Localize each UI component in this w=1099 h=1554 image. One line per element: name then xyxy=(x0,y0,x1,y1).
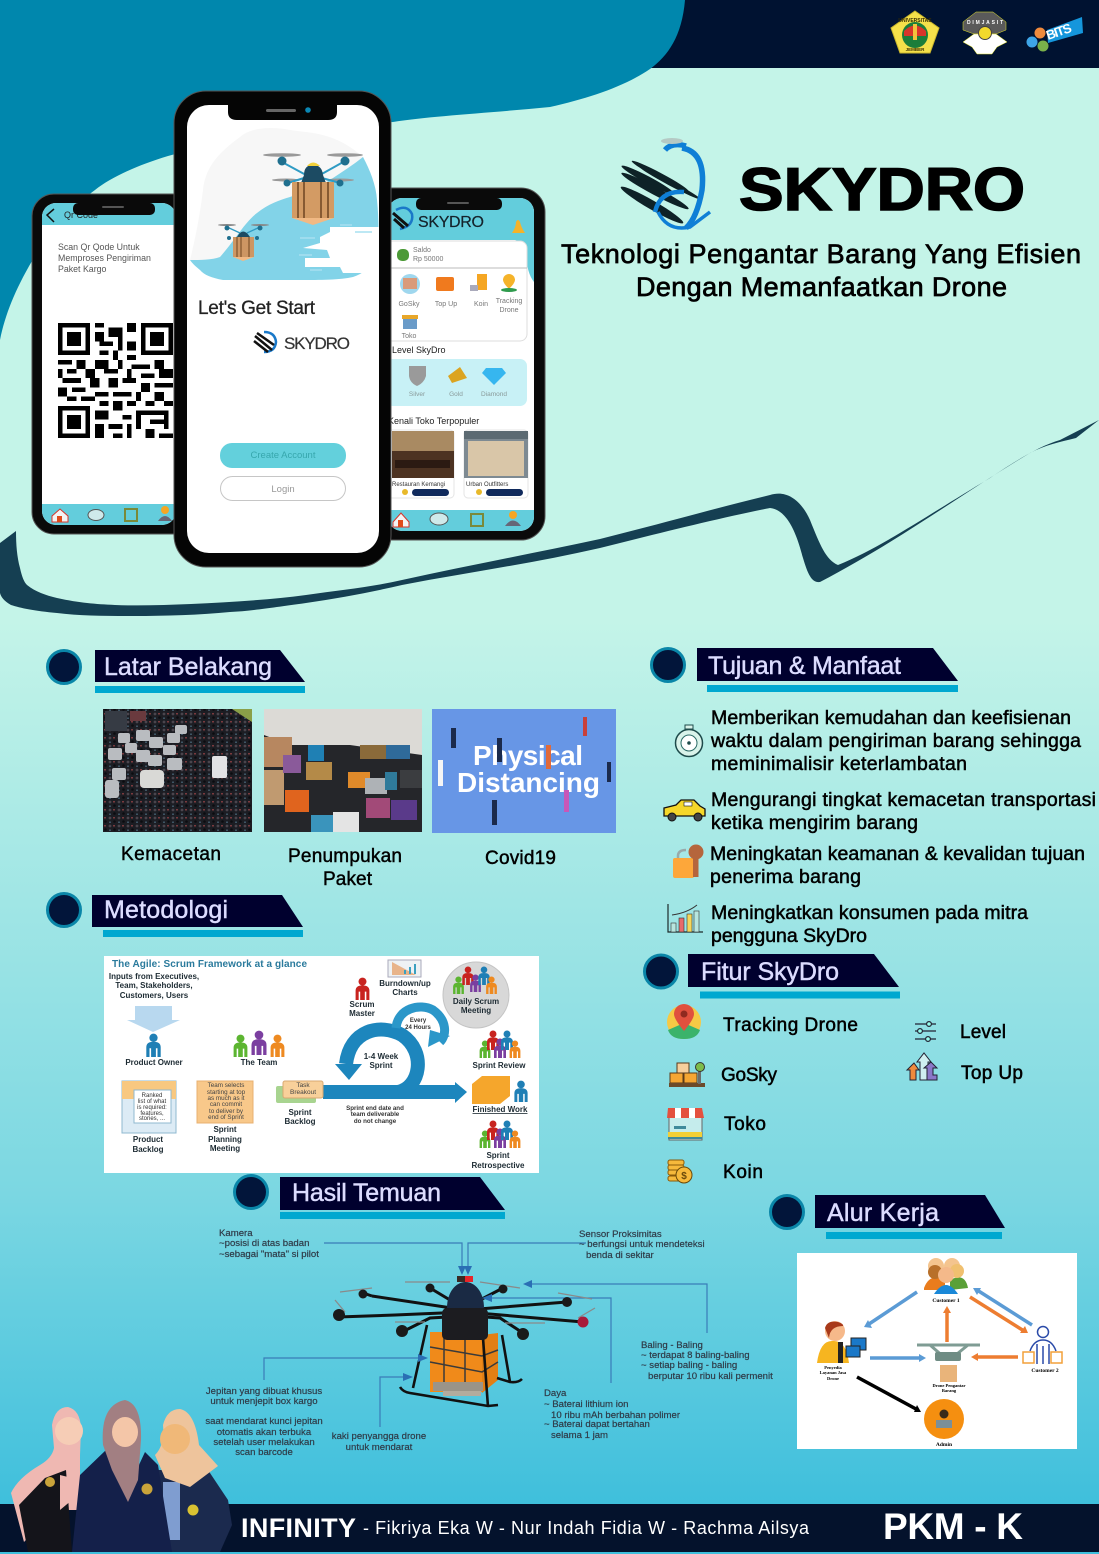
footer team text xyxy=(241,1513,810,1543)
customer 2: Customer 2 xyxy=(1031,1368,1059,1374)
feature: Koin: Koin xyxy=(723,1162,763,1183)
benefit: time: Memberikan kemudahan dan keefisienan xyxy=(711,707,1071,729)
callout: daya: ~ Baterai dapat bertahan xyxy=(544,1419,650,1430)
feature: GoSky: GoSky xyxy=(721,1065,778,1086)
chart: scrum framework diagram: 24 Hours xyxy=(405,1025,431,1031)
phone: home screen: Toko xyxy=(402,333,416,340)
icon: lock and key xyxy=(673,844,704,878)
feature: GoSky xyxy=(669,1062,778,1087)
callout arrows xyxy=(403,1266,532,1381)
photo captions: Penumpukan xyxy=(288,846,402,867)
chart: scrum framework diagram: as much as it xyxy=(207,1095,245,1102)
feature: Top Up xyxy=(907,1053,1023,1084)
callout: jepitan xyxy=(205,1386,323,1458)
icon: coins: $ xyxy=(681,1171,687,1182)
benefit: consumers: Meningkatkan konsumen pada mitra xyxy=(711,902,1028,924)
photo: physical distancing: Distancing xyxy=(457,767,600,798)
inputs: Inputs from Executives, xyxy=(109,972,199,981)
button: create account xyxy=(220,443,346,468)
small drone xyxy=(218,224,269,261)
footer team text: INFINITY xyxy=(241,1513,356,1543)
chart: scrum framework diagram: list of what xyxy=(138,1099,166,1105)
big drone xyxy=(263,153,363,225)
customer 1 xyxy=(924,1258,968,1304)
phone: home screen: Gold xyxy=(449,391,463,398)
footer band xyxy=(0,1504,1099,1552)
callout: daya: ~ Baterai lithium ion xyxy=(544,1399,629,1410)
photo captions: Covid19 xyxy=(485,848,556,869)
heading: Fitur SkyDro: Fitur SkyDro xyxy=(701,958,839,986)
chart: scrum framework diagram: do not change xyxy=(354,1118,397,1125)
inputs xyxy=(109,972,199,1000)
person right xyxy=(155,1409,232,1552)
phone: home screen: Drone xyxy=(499,307,519,314)
chart: scrum framework diagram: Ranked xyxy=(142,1093,162,1099)
logo: Universitas Jember: JEMBER xyxy=(906,47,925,52)
burndown charts xyxy=(388,960,421,977)
benefit: consumers xyxy=(668,902,1028,947)
feature: Level xyxy=(915,1022,1006,1043)
logos xyxy=(891,11,1083,54)
phone body xyxy=(174,91,391,567)
app logo xyxy=(396,208,412,229)
phone: home screen: Urban Outfitters xyxy=(466,482,508,488)
phone body xyxy=(360,188,545,540)
photo: physical distancing: Physical xyxy=(473,740,583,771)
icon: parcels on scale xyxy=(669,1062,705,1087)
finished work xyxy=(472,1076,510,1104)
title: SKYDRO xyxy=(739,156,1025,223)
callout: jepitan: untuk menjepit box kargo xyxy=(210,1396,318,1407)
heading: Hasil Temuan xyxy=(234,1176,505,1219)
balance card xyxy=(385,241,527,341)
workflow diagram xyxy=(797,1253,1077,1449)
admin xyxy=(924,1399,964,1448)
heading: Tujuan & Manfaat: Tujuan & Manfaat xyxy=(708,652,901,680)
heading: Metodologi: Metodologi xyxy=(104,896,228,924)
chart: scrum framework diagram: Breakout xyxy=(290,1089,316,1096)
app logo: SKYDRO xyxy=(284,334,350,353)
phone: home screen: SKYDRO xyxy=(418,214,484,231)
subtitle: Teknologi Pengantar Barang Yang Efisien xyxy=(561,239,1081,269)
button: create account: Create Account xyxy=(251,450,316,461)
phone: home screen: Rp 50000 xyxy=(413,256,443,263)
bottom nav xyxy=(388,510,534,531)
chart: scrum framework diagram: stories, ... xyxy=(139,1116,165,1122)
feature: tracking drone xyxy=(667,1004,858,1039)
feature: tracking drone: Tracking Drone xyxy=(723,1015,858,1036)
benefit: traffic: Mengurangi tingkat kemacetan transportasi xyxy=(711,789,1096,811)
chart: scrum framework diagram: Team selects xyxy=(208,1082,244,1089)
admin: Admin xyxy=(936,1442,952,1448)
chart: scrum framework diagram: Burndown/up xyxy=(379,979,431,988)
callout: kamera: ~sebagai "mata" si pilot xyxy=(219,1249,319,1260)
icon: car xyxy=(664,800,705,821)
icon: map pin xyxy=(667,1004,701,1039)
callout: jepitan: setelah user melakukan xyxy=(213,1437,315,1448)
callout: baling: berputar 10 ribu kali permenit xyxy=(648,1371,773,1382)
notch xyxy=(416,198,502,210)
heading: Fitur SkyDro xyxy=(644,954,900,998)
chart: scrum framework diagram: Scrum xyxy=(350,1000,374,1009)
benefit: traffic xyxy=(664,789,1096,834)
QR code xyxy=(58,323,173,438)
chart: scrum framework diagram: Meeting xyxy=(461,1006,491,1015)
callout: daya xyxy=(544,1388,681,1441)
chart: scrum framework diagram: is required: xyxy=(137,1105,167,1111)
callout: jepitan: saat mendarat kunci jepitan xyxy=(205,1416,323,1427)
callout: baling: ~ setiap baling - baling xyxy=(641,1360,737,1371)
chart: scrum framework diagram: end of Sprint xyxy=(208,1114,244,1121)
team photo xyxy=(11,1400,232,1552)
chart: scrum framework diagram: features, xyxy=(140,1111,164,1117)
chart: scrum framework diagram: Backlog xyxy=(284,1117,316,1126)
callout: jepitan: Jepitan yang dibuat khusus xyxy=(206,1386,322,1397)
callout: baling: Baling - Baling xyxy=(641,1340,703,1351)
logo: BITS: BITS xyxy=(1044,20,1074,43)
callout: sensor: Sensor Proksimitas xyxy=(579,1229,662,1240)
callout: daya: 10 ribu mAh berbahan polimer xyxy=(551,1410,681,1421)
photo: physical distancing xyxy=(432,709,616,833)
heading: Alur Kerja: Alur Kerja xyxy=(827,1199,939,1227)
callout: kamera xyxy=(219,1228,319,1260)
drone diagram xyxy=(205,1228,773,1458)
benefit: time: waktu dalam pengiriman barang sehingga xyxy=(710,730,1081,752)
callout lines xyxy=(264,1243,707,1427)
heading: Latar Belakang xyxy=(48,650,305,693)
chart: scrum framework diagram: Daily Scrum xyxy=(453,997,499,1006)
scrum master xyxy=(356,978,369,1000)
phone: home screen: Diamond xyxy=(481,391,507,398)
callout: baling: ~ terdapat 8 baling-baling xyxy=(641,1350,750,1361)
callout: jepitan: otomatis akan terbuka xyxy=(217,1427,312,1438)
inputs: Team, Stakeholders, xyxy=(115,981,193,990)
heading: Let's Get Start xyxy=(198,298,316,319)
menu xyxy=(400,274,420,294)
button: login xyxy=(220,476,346,500)
delivery drone xyxy=(917,1345,980,1393)
notch xyxy=(228,104,337,120)
sprint arrows xyxy=(323,1007,467,1103)
planning meeting xyxy=(197,1081,253,1123)
logo: Universitas Jember: UNIVERSITAS xyxy=(898,18,932,24)
chart: scrum framework diagram: Master xyxy=(349,1009,375,1018)
customer 1: Customer 1 xyxy=(932,1298,960,1304)
chart: scrum framework diagram: Backlog xyxy=(132,1145,164,1154)
inputs: Customers, Users xyxy=(120,991,189,1000)
benefit: time: meminimalisir keterlambatan xyxy=(711,753,967,775)
chart: scrum framework diagram: The Team xyxy=(241,1058,277,1067)
phone: home screen: Restauran Kemangi xyxy=(392,482,445,488)
delivery drone: Barang xyxy=(942,1388,957,1393)
chart: scrum framework diagram: Sprint xyxy=(288,1108,312,1117)
chart: scrum framework diagram xyxy=(104,956,539,1173)
chart: scrum framework diagram: Sprint xyxy=(213,1125,237,1134)
logo: hexagon: DIMJASIT xyxy=(967,20,1003,26)
feature: Toko: Toko xyxy=(724,1114,766,1135)
icon: stopwatch xyxy=(676,725,702,756)
logo: BITS xyxy=(1026,17,1083,52)
chart: scrum framework diagram: 1-4 Week xyxy=(364,1052,399,1061)
callout: kaki xyxy=(332,1431,426,1453)
icon: sliders xyxy=(915,1022,936,1041)
chart: scrum framework diagram: Sprint xyxy=(369,1061,393,1070)
icon: growth chart xyxy=(668,904,703,932)
icon: shop xyxy=(667,1108,704,1140)
caption: Memproses Pengiriman xyxy=(58,253,151,263)
callout: daya: Daya xyxy=(544,1388,567,1399)
benefit: time xyxy=(676,707,1081,775)
chart: scrum framework diagram: Meeting xyxy=(210,1144,240,1153)
callout: kamera: Kamera xyxy=(219,1228,253,1239)
benefit: security: Meningkatan keamanan & kevalidan tujuan xyxy=(710,843,1085,865)
photo captions: Paket xyxy=(323,869,373,890)
chart: scrum framework diagram: Sprint end date and xyxy=(346,1105,404,1112)
phone: home screen: Silver xyxy=(409,391,426,398)
chart: scrum framework diagram: Every xyxy=(410,1018,427,1024)
sprint retrospective: Sprint xyxy=(486,1151,510,1160)
level panel: Level SkyDro xyxy=(392,345,446,355)
benefit: consumers: pengguna SkyDro xyxy=(711,925,867,947)
photo captions xyxy=(121,844,556,890)
phone: QR code screen: Qr Code xyxy=(64,210,98,220)
drone illustration xyxy=(190,128,377,270)
heading: Hasil Temuan: Hasil Temuan xyxy=(292,1179,441,1207)
delivery drone: Drone Pengantar xyxy=(932,1383,966,1388)
product backlog xyxy=(122,1081,176,1133)
sprint review xyxy=(473,1031,526,1070)
customer 2 xyxy=(1023,1326,1062,1374)
phone: home screen: Top Up xyxy=(435,301,457,308)
chart: scrum framework diagram: Task xyxy=(296,1082,310,1089)
caption: Scan Qr Qode Untuk xyxy=(58,242,140,252)
chart: scrum framework diagram: Finished Work xyxy=(473,1105,528,1114)
photo: piled parcels xyxy=(264,709,422,832)
app logo xyxy=(254,332,350,353)
chart: scrum framework diagram: Planning xyxy=(208,1135,242,1144)
flow arrowheads xyxy=(864,1288,1028,1412)
chart: scrum framework diagram: team deliverable xyxy=(351,1111,400,1118)
the team xyxy=(234,1035,247,1057)
logo: hexagon xyxy=(963,12,1007,54)
person left xyxy=(11,1407,83,1552)
callout: sensor xyxy=(579,1229,705,1261)
benefit: security xyxy=(673,843,1085,888)
scrum title: The Agile: Scrum Framework at a glance xyxy=(112,959,307,970)
chart: scrum framework diagram: to deliver by xyxy=(209,1108,244,1115)
footer team text: - Fikriya Eka W - Nur Indah Fidia W - Rachma Ailsya xyxy=(363,1518,810,1538)
callout: kaki: untuk mendarat xyxy=(346,1442,413,1453)
subtitle xyxy=(561,239,1081,302)
button: login: Login xyxy=(271,484,295,495)
phone: welcome screen xyxy=(174,91,391,567)
feature: Toko xyxy=(667,1108,766,1140)
sprint retrospective: Retrospective xyxy=(472,1161,525,1170)
popular shops: Kenali Toko Terpopuler xyxy=(388,416,479,426)
subtitle: Dengan Memanfaatkan Drone xyxy=(636,272,1007,302)
phone body xyxy=(32,194,202,534)
phone: QR code screen xyxy=(32,194,174,534)
drone photo xyxy=(333,1276,595,1407)
phone: home screen: GoSky xyxy=(398,301,420,308)
service provider: Layanan Jasa xyxy=(820,1370,847,1375)
phone: home screen xyxy=(391,188,546,540)
chart: scrum framework diagram: Charts xyxy=(392,988,418,997)
service provider: Drone xyxy=(827,1376,839,1381)
icon: up arrows xyxy=(907,1053,937,1080)
heading: Latar Belakang: Latar Belakang xyxy=(104,653,272,681)
service provider: Penyedia xyxy=(824,1365,842,1370)
sprint retrospective xyxy=(472,1121,525,1170)
big SKYDRO logo mark xyxy=(619,138,710,228)
callout: kaki: kaki penyangga drone xyxy=(332,1431,426,1442)
teal top curve xyxy=(0,0,685,340)
daily scrum xyxy=(443,962,509,1028)
heading: Metodologi xyxy=(48,894,303,937)
photo captions: Kemacetan xyxy=(121,844,221,865)
feature: Level: Level xyxy=(960,1022,1006,1043)
person middle xyxy=(72,1400,172,1552)
caption: Paket Kargo xyxy=(58,264,107,274)
caption xyxy=(58,242,151,274)
flow arrows xyxy=(857,1290,1032,1409)
callout: jepitan: scan barcode xyxy=(235,1447,293,1458)
service provider xyxy=(817,1321,866,1381)
callout: baling xyxy=(641,1340,773,1382)
heading: Alur Kerja xyxy=(770,1195,1005,1239)
chart: scrum framework diagram: Product xyxy=(133,1135,163,1144)
feature: Koin xyxy=(668,1160,763,1183)
bottom nav icons xyxy=(52,509,68,522)
photo: traffic jam xyxy=(103,709,252,832)
benefit: traffic: ketika mengirim barang xyxy=(711,812,918,834)
chart: scrum framework diagram: starting at top xyxy=(207,1089,246,1096)
callout: kamera: ~posisi di atas badan xyxy=(219,1238,309,1249)
feature: Top Up: Top Up xyxy=(961,1063,1023,1084)
chart: scrum framework diagram: can commit xyxy=(210,1101,242,1108)
phone: home screen: Tracking xyxy=(496,298,522,305)
logo: Universitas Jember xyxy=(891,11,939,53)
phone: home screen: Koin xyxy=(474,301,488,308)
phone: home screen: Saldo xyxy=(413,247,431,254)
notch xyxy=(73,203,155,215)
callout: sensor: benda di sekitar xyxy=(586,1250,655,1261)
chart: scrum framework diagram: Product Owner xyxy=(125,1058,183,1067)
callout: daya: selama 1 jam xyxy=(551,1430,608,1441)
sprint backlog xyxy=(276,1086,316,1103)
header band xyxy=(600,0,1099,68)
dark swoosh xyxy=(0,420,1099,616)
benefit: security: penerima barang xyxy=(710,866,861,888)
callout: sensor: ~ berfungsi untuk mendeteksi xyxy=(579,1239,705,1250)
heading: Tujuan & Manfaat xyxy=(652,648,958,692)
footer PKM-K: PKM - K xyxy=(883,1506,1023,1547)
sprint review: Sprint Review xyxy=(473,1061,526,1070)
